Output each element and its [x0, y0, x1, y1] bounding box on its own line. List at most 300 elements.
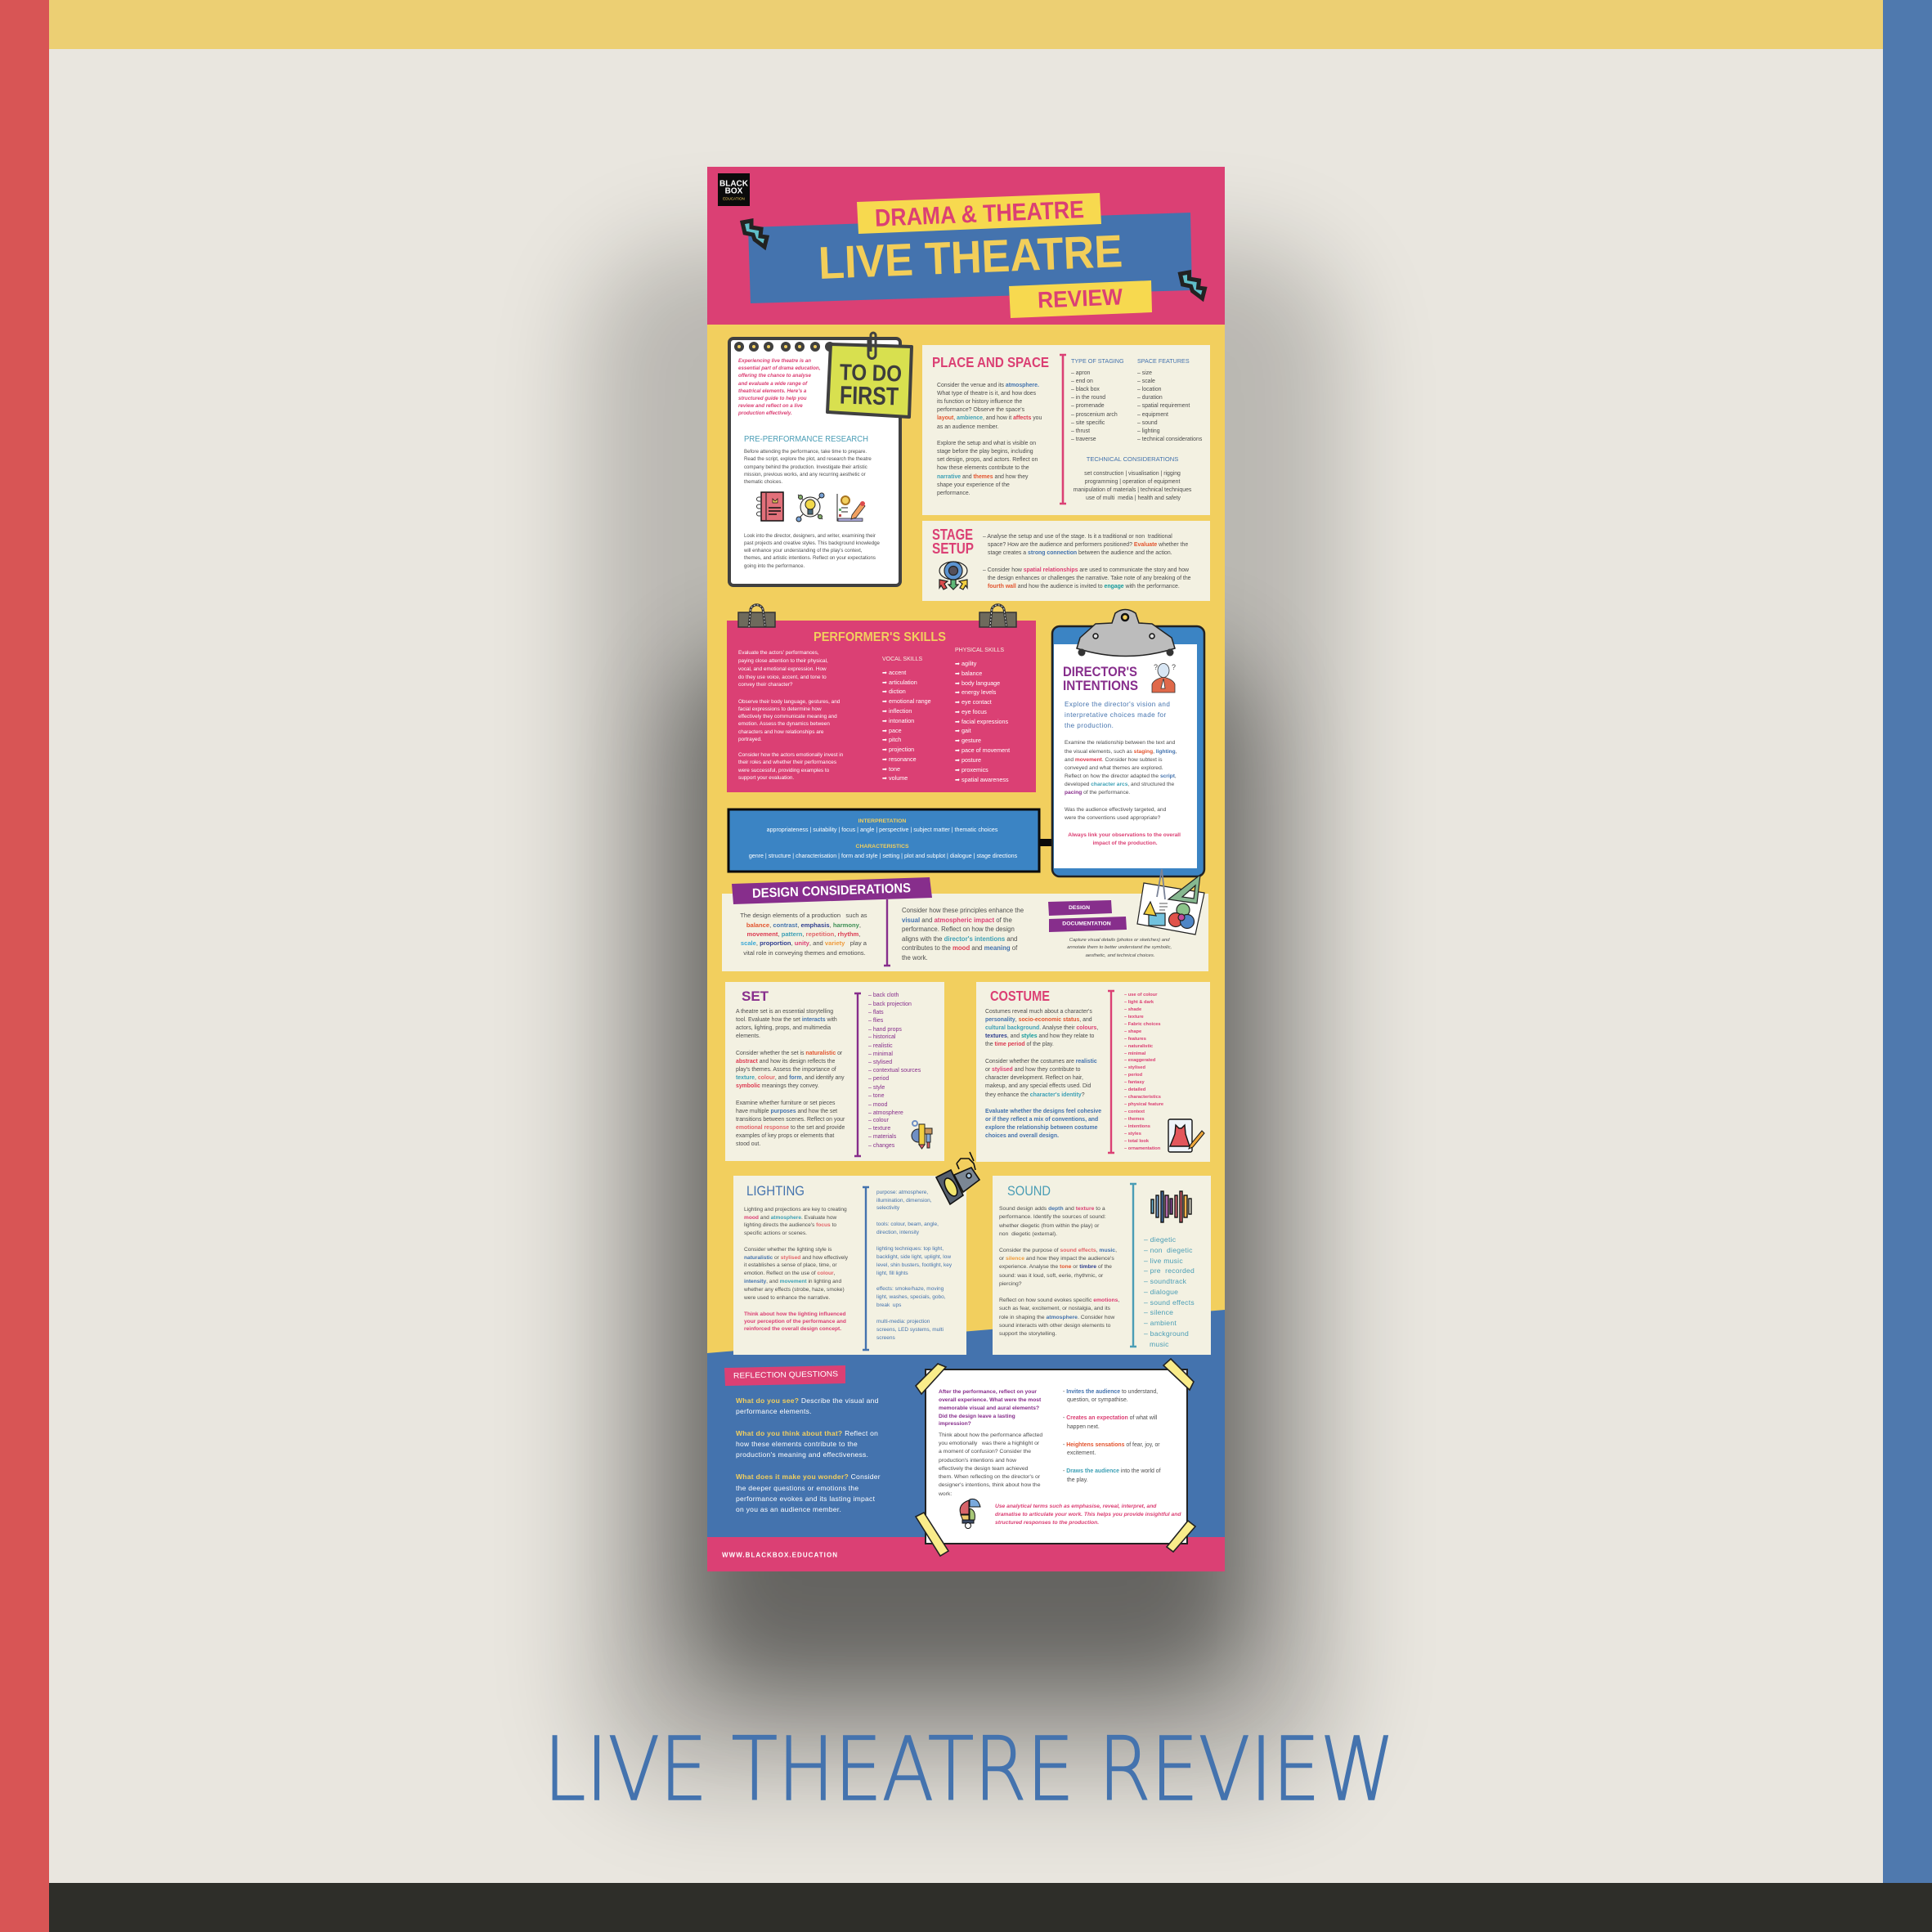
list: sound terms: – diegetic: [1144, 1235, 1177, 1244]
text: research paragraph: thematic choices.: [744, 479, 782, 484]
text: lighting terms: purpose: atmosphere,: [876, 1189, 928, 1195]
text: set body: actors, lighting, props, and multimedia: [736, 1025, 831, 1030]
text: director body: conveyed and what themes are explored.: [1065, 765, 1163, 770]
heading: lighting: LIGHTING: [746, 1183, 805, 1199]
list: physical skills: ➡ balance: [955, 669, 982, 677]
text: lighting body: whether any effects (strobe, haze, smoke): [743, 1287, 845, 1292]
text: set body: tool. Evaluate how the set interacts with: [736, 1017, 837, 1022]
list: costume terms: – exaggerated: [1124, 1058, 1156, 1063]
text: venue paragraphs: stage before the play begins, including: [937, 448, 1033, 455]
text: lighting terms: light, washes, specials, gobo,: [876, 1293, 946, 1300]
text: stage analysis: stage creates a strong connection between the audience and the action.: [988, 549, 1172, 556]
text: sound body: non diegetic (external).: [999, 1231, 1057, 1236]
list: costume terms: – shape: [1124, 1029, 1141, 1034]
text: lighting body: lighting directs the audience's focus to: [744, 1222, 836, 1228]
list: costume terms: – fantasy: [1124, 1080, 1145, 1085]
list: vocal skills: ➡ emotional range: [882, 697, 931, 705]
tape: bottom left: [916, 1513, 948, 1556]
panel: interpretation and characteristics: [728, 809, 1054, 872]
text: costume body: Costumes reveal much about a character's: [985, 1009, 1092, 1014]
text: reflection questions: What do you think about that? Reflect on: [736, 1429, 878, 1437]
text: sound body: support the storytelling.: [999, 1331, 1056, 1336]
text: set body: stood out.: [736, 1141, 760, 1146]
text: director body: developed character arcs, and structured the: [1065, 782, 1174, 787]
text: look into paragraph: will enhance your understanding of the play's context,: [743, 548, 863, 553]
text: director body: pacing of the performance.: [1065, 790, 1130, 795]
text: stage analysis: – Analyse the setup and use of the stage. Is it a traditional or non traditional: [983, 533, 1172, 540]
list: costume terms: – features: [1124, 1037, 1146, 1042]
text: set body: transitions between scenes. Reflect on your: [736, 1117, 845, 1122]
text: lighting body: specific actions or scenes.: [744, 1230, 807, 1236]
list: set terms: – period: [868, 1076, 889, 1081]
frame: top yellow bar: [49, 0, 1883, 49]
icon: gear pencil brush: [912, 1121, 932, 1149]
text: costume body: makeup, and any special effects used. Did: [985, 1083, 1092, 1089]
sticky note: to do first: [827, 333, 912, 417]
text: sound body: sound interacts with other design elements to: [999, 1323, 1111, 1328]
text: director body: and movement. Consider how subtext is: [1065, 757, 1163, 762]
text: stage analysis: the design enhances or challenges the narrative. Take note of any breaking of the: [988, 576, 1191, 580]
icon: puzzle bulb: [960, 1499, 980, 1529]
list: costume terms: – context: [1124, 1109, 1145, 1114]
text: costume body: Evaluate whether the designs feel cohesive: [985, 1109, 1101, 1114]
list: space features: – equipment: [1137, 412, 1168, 417]
text: lighting body: emotion. Reflect on the use of colour,: [744, 1271, 835, 1275]
text: think about: effectively the design team achieved: [939, 1465, 1029, 1472]
text: performer paragraphs: emotion. Assess the dynamics between: [738, 721, 830, 726]
icon: lightning right: [1181, 272, 1205, 298]
list: type of staging: – promenade: [1071, 402, 1105, 409]
text: think about: designer's intentions, think about how the: [939, 1481, 1041, 1488]
text: sound body: performance. Identify the sources of sound:: [999, 1213, 1106, 1220]
tape: documentation: DOCUMENTATION: [1062, 921, 1111, 927]
intro text: Experiencing live theatre is an: [738, 358, 811, 363]
heading: stage setup: STAGE: [932, 527, 973, 543]
tape: design: [1048, 900, 1112, 916]
list: set terms: – flats: [868, 1009, 884, 1015]
title tape: review: [1009, 280, 1152, 318]
text: costume body: character development. Reflect on hair,: [985, 1074, 1083, 1081]
text: capture visual details: aesthetic, and technical choices.: [1086, 953, 1154, 958]
text: lighting terms: backlight, side light, uplight, low: [876, 1254, 951, 1259]
list: sound terms: – silence: [1144, 1308, 1173, 1316]
text: lighting body: were used to enhance the narrative.: [743, 1295, 830, 1300]
text: principles: performance. Reflect on how the design: [902, 926, 1015, 932]
text: lighting body: naturalistic or stylised and how effectively: [744, 1254, 848, 1261]
text: costume body: they enhance the character's identity?: [985, 1092, 1085, 1097]
list: set terms: – style: [868, 1084, 885, 1091]
list: vocal skills: ➡ articulation: [882, 679, 917, 685]
list: costume terms: – use of colour: [1124, 993, 1158, 997]
list: type of staging: – traverse: [1071, 437, 1096, 442]
frame: right blue bar: [1883, 0, 1932, 1883]
list: costume terms: – texture: [1124, 1015, 1144, 1020]
text: capture visual details: Capture visual details (photos or sketches) and: [1069, 938, 1170, 943]
text: lighting body: reinforced the overall design concept.: [744, 1326, 841, 1331]
list: vocal skills: ➡ intonation: [882, 716, 914, 724]
list: vocal skills: ➡ tone: [882, 765, 900, 772]
list: physical skills: ➡ eye contact: [955, 698, 992, 705]
text: costume body: or if they reflect a mix of conventions, and: [985, 1117, 1098, 1122]
list: sound terms: – soundtrack: [1144, 1277, 1187, 1285]
list: costume terms: – minimal: [1124, 1051, 1146, 1056]
list: set terms: – mood: [868, 1102, 887, 1107]
logo: EDUCATION: [723, 196, 745, 201]
list: physical skills: ➡ pace of movement: [955, 746, 1010, 754]
list: sound terms: – pre recorded: [1144, 1266, 1195, 1275]
list: vocal skills: ➡ pace: [882, 726, 902, 734]
list: set terms: – materials: [868, 1133, 897, 1140]
icon: document and pencil: [837, 494, 865, 522]
reflection questions heading tape: REFLECTION QUESTIONS: [733, 1369, 838, 1381]
text: bullet points: - Heightens sensations of fear, joy, or: [1063, 1442, 1160, 1447]
list: set terms: – tone: [868, 1092, 885, 1099]
list: physical skills: ➡ posture: [955, 755, 981, 764]
list: vocal skills: ➡ accent: [882, 669, 906, 675]
text: performer paragraphs: vocal, and emotional expression. How: [738, 666, 827, 672]
text: venue paragraphs: shape your experience of the: [937, 482, 1010, 487]
panel: costume: [976, 982, 1210, 1162]
heading: pre-performance research: PRE-PERFORMANCE RESEARCH: [744, 435, 868, 444]
text: performer paragraphs: support your evaluation.: [738, 775, 794, 780]
text: performer paragraphs: convey their character?: [738, 682, 793, 687]
text: performer paragraphs: effectively they communicate meaning and: [738, 713, 837, 719]
panel: director's intentions clipboard: [1052, 610, 1204, 876]
text: principles: contributes to the mood and meaning of: [902, 944, 1017, 952]
text: set body: elements.: [736, 1033, 760, 1038]
text: think about: Think about how the performance affected: [939, 1432, 1042, 1437]
text: reflection questions: how these elements contribute to the: [736, 1440, 858, 1448]
tape: design: DESIGN: [1069, 905, 1090, 911]
list: costume terms: – stylised: [1124, 1065, 1145, 1070]
text: lighting body: Consider whether the lighting style is: [744, 1246, 832, 1253]
list: costume terms: – Fabric choices: [1124, 1022, 1161, 1027]
text: design elements: vital role in conveying themes and emotions.: [743, 948, 866, 957]
text: design elements: movement, pattern, repetition, rhythm,: [746, 930, 860, 937]
list: type of staging: TYPE OF STAGING: [1071, 356, 1124, 365]
text: set body: symbolic meanings they convey.: [736, 1083, 819, 1089]
heading: director's intentions: DIRECTOR'S: [1063, 664, 1137, 679]
heading: sound: SOUND: [1007, 1183, 1051, 1199]
text: bullet points: question, or sympathise.: [1067, 1396, 1128, 1403]
icon: eye with arrows: [939, 562, 967, 589]
panel: stage setup: [922, 521, 1210, 601]
text: research paragraph: company behind the production. Investigate their artistic: [744, 464, 867, 469]
list: costume terms: – shade: [1124, 1007, 1141, 1012]
text: reflection questions: What does it make you wonder? Consider: [736, 1473, 881, 1481]
list: sound terms: – ambient: [1144, 1319, 1177, 1327]
panel: design considerations: [722, 869, 1208, 971]
list: costume terms: – light & dark: [1124, 1000, 1154, 1005]
logo: BLACK: [719, 180, 749, 188]
footer website: WWW.BLACKBOX.EDUCATION: [722, 1552, 838, 1558]
text: costume body: choices and overall design.: [985, 1133, 1059, 1138]
text: explore the vision: interpretative choices made for: [1065, 711, 1167, 718]
poster lower blue background: [707, 1310, 1225, 1537]
text: venue paragraphs: set design, props, and actors. Reflect on: [937, 456, 1038, 463]
poster body yellow background: [707, 325, 1225, 1355]
text: design elements: balance, contrast, emphasis, harmony,: [746, 921, 861, 929]
list: space features: – technical considerations: [1137, 437, 1203, 442]
text: principles: Consider how these principles enhance the: [902, 906, 1024, 914]
text: venue paragraphs: as an audience member.: [937, 424, 999, 430]
text: think about: you emotionally was there a highlight or: [939, 1441, 1040, 1446]
text: look into paragraph: past projects and creative styles. This background knowledge: [744, 540, 880, 546]
list: vocal skills: ➡ inflection: [882, 706, 912, 715]
heading tape: design considerations: DESIGN CONSIDERATIONS: [752, 881, 912, 901]
text: reflection questions: on you as an audience member.: [736, 1505, 841, 1513]
tape: top left: [916, 1364, 946, 1394]
divider stem: [884, 899, 890, 966]
text: after the performance: overall experience. What were the most: [939, 1396, 1042, 1403]
text: lighting body: Lighting and projections are key to creating: [744, 1207, 847, 1212]
list: vocal skills: ➡ pitch: [882, 736, 901, 742]
text: venue paragraphs: narrative and themes and how they: [937, 474, 1029, 479]
list: costume terms: – naturalistic: [1124, 1044, 1153, 1049]
background shadow behind poster: [589, 245, 1341, 1791]
list: vocal skills: ➡ projection: [882, 746, 914, 752]
bottom caption: live theatre review: LIVE THEATRE REVIEW: [544, 1719, 1395, 1821]
list: physical skills: ➡ proxemics: [955, 765, 988, 773]
text: interpretation: appropriateness | suitability | focus | angle | perspective | subject matter | thematic choices: [767, 827, 998, 833]
icon: dress and pencil: [1168, 1119, 1204, 1152]
text: reflection questions: the deeper questions or emotions the: [736, 1484, 858, 1492]
panel: taped note: [916, 1359, 1195, 1556]
text: reflection questions: performance elements.: [736, 1407, 812, 1415]
list: set terms: – back projection: [868, 1001, 912, 1007]
text: performer paragraphs: paying close attention to their physical,: [738, 657, 828, 664]
icon: thinking director: [1152, 663, 1176, 693]
list: space features: – duration: [1137, 394, 1163, 401]
text: set body: examples of key props or elements that: [736, 1133, 834, 1138]
list: set terms: – texture: [868, 1125, 890, 1132]
text: lighting terms: break ups: [876, 1302, 902, 1308]
text: venue paragraphs: performance.: [937, 491, 970, 495]
heading: director's intentions: INTENTIONS: [1063, 678, 1138, 693]
list: space features: – location: [1137, 386, 1162, 392]
list: set terms: – contextual sources: [868, 1068, 921, 1073]
text: design elements: The design elements of a production such as: [740, 911, 867, 919]
text: sound body: role in shaping the atmosphere. Consider how: [999, 1315, 1114, 1320]
text: after the performance: After the performance, reflect on your: [939, 1388, 1037, 1395]
list: sound terms: – live music: [1144, 1257, 1183, 1265]
text: venue paragraphs: Explore the setup and what is visible on: [937, 440, 1036, 446]
text: sound body: experience. Analyse the tone or timbre of the: [999, 1264, 1112, 1269]
list: set terms: – changes: [868, 1143, 895, 1148]
list: costume terms: – characteristics: [1124, 1095, 1161, 1100]
text: set body: abstract and how its design reflects the: [736, 1058, 835, 1065]
list: costume terms: – physical feature: [1124, 1102, 1163, 1107]
text: lighting terms: light, fill lights: [876, 1271, 908, 1275]
list: sound terms: – background: [1144, 1329, 1189, 1338]
list: type of staging: – apron: [1071, 370, 1091, 376]
text: lighting terms: screens, LED systems, multi: [876, 1326, 944, 1333]
list: physical skills: ➡ spatial awareness: [955, 775, 1009, 783]
panel: performer's skills: [727, 605, 1036, 792]
text: lighting body: your perception of the performance and: [744, 1318, 846, 1325]
intro text: theatrical elements. Here's a: [738, 388, 807, 394]
list: costume terms: – period: [1124, 1073, 1143, 1078]
text: capture visual details: annotate them to better understand the symbolic,: [1067, 945, 1172, 950]
tape: documentation: [1049, 917, 1127, 932]
panel: to do first notebook: [729, 333, 912, 585]
list: space features: – lighting: [1137, 428, 1160, 433]
list: set terms: – atmosphere: [868, 1110, 903, 1115]
text: sound body: whether diegetic (from within the play) or: [998, 1223, 1100, 1228]
list: type of staging: – site specific: [1071, 420, 1105, 425]
text: performer paragraphs: were successful, providing examples to: [737, 767, 830, 773]
text: director body: the visual elements, such as staging, lighting,: [1065, 749, 1177, 754]
header band: [707, 167, 1225, 325]
text: lighting terms: illumination, dimension,: [876, 1197, 932, 1204]
text: sound body: or silence and how they impact the audience's: [999, 1256, 1114, 1261]
text: lighting terms: screens: [876, 1334, 896, 1341]
text: costume body: cultural background. Analyse their colours,: [985, 1025, 1098, 1030]
sticky note: to do first: FIRST: [840, 381, 899, 410]
list: type of staging: – proscenium arch: [1071, 412, 1118, 417]
text: venue paragraphs: Consider the venue and its atmosphere.: [937, 383, 1039, 388]
intro text: offering the chance to analyse: [738, 373, 812, 378]
intro text: production effectively.: [737, 410, 792, 415]
reflection questions heading tape: [724, 1365, 845, 1386]
text: reflection questions: production's meaning and effectiveness.: [736, 1450, 868, 1459]
text: research paragraph: mission, previous works, and any recurring aesthetic or: [744, 471, 866, 477]
text: interpretation: INTERPRETATION: [858, 818, 906, 824]
heading: place and space: PLACE AND SPACE: [932, 354, 1049, 370]
list: type of staging: – thrust: [1071, 428, 1090, 433]
text: sound body: Consider the purpose of sound effects, music,: [999, 1248, 1117, 1253]
text: research paragraph: Read the script, explore the plot, and research the theatre: [744, 456, 872, 461]
clipboard clip: [1077, 610, 1175, 656]
text: performer paragraphs: characters and how relationships are: [738, 729, 824, 734]
list: set terms: – flies: [868, 1017, 884, 1024]
panel: sound: [993, 1176, 1211, 1355]
list: sound terms: – sound effects: [1144, 1298, 1195, 1307]
list: physical skills: ➡ facial expressions: [955, 718, 1009, 724]
list: sound terms: – dialogue: [1144, 1288, 1178, 1296]
text: venue paragraphs: how these elements contribute to the: [937, 464, 1029, 471]
logo: [718, 173, 750, 206]
list: vocal skills: ➡ volume: [882, 773, 908, 782]
text: look into paragraph: themes, and artistic intentions. Reflect on your expectations: [744, 554, 876, 561]
text: link observations: Always link your observations to the overall: [1068, 832, 1181, 837]
text: performer paragraphs: do they use voice, accent, and tone to: [738, 674, 827, 680]
text: lighting terms: effects: smoke/haze, moving: [876, 1285, 944, 1292]
text: set body: Examine whether furniture or set pieces: [736, 1100, 836, 1105]
text: bullet points: the play.: [1067, 1477, 1088, 1483]
list: physical skills: ➡ gait: [955, 726, 971, 734]
panel: set: [725, 982, 944, 1161]
text: performer paragraphs: Evaluate the actors' performances,: [738, 649, 819, 656]
list: set terms: – stylised: [868, 1060, 892, 1065]
technical considerations: manipulation of materials | technical techniques: [1074, 487, 1192, 492]
text: venue paragraphs: performance? Observe the space's: [937, 407, 1025, 412]
list: set terms: – minimal: [868, 1051, 893, 1056]
text: stage analysis: – Consider how spatial relationships are used to communicate the story and how: [983, 567, 1189, 572]
text: analytical terms: dramatise to articulate your work. This helps you provide insightful and: [995, 1511, 1181, 1517]
icon: lightning left: [742, 221, 767, 247]
list: costume terms: – ornamentation: [1124, 1146, 1161, 1151]
icon: thinking director: ?: [1154, 663, 1158, 671]
text: think about: them. When reflecting on the director's or: [939, 1473, 1041, 1480]
panel: place and space: [922, 345, 1210, 515]
text: sound body: piercing?: [999, 1280, 1022, 1287]
heading: set: SET: [742, 988, 769, 1004]
text: principles: the work.: [902, 953, 928, 962]
text: bullet points: happen next.: [1067, 1424, 1100, 1429]
list: costume terms: – intentions: [1124, 1124, 1150, 1129]
text: reflection questions: What do you see? Describe the visual and: [736, 1396, 879, 1405]
text: lighting terms: multi-media: projection: [876, 1318, 930, 1325]
text: sound body: Reflect on how sound evokes specific emotions,: [999, 1297, 1119, 1303]
text: lighting body: it establishes a sense of place, time, or: [744, 1262, 837, 1267]
heading: performer's skills: PERFORMER'S SKILLS: [814, 630, 946, 644]
list: physical skills: ➡ eye focus: [955, 708, 987, 715]
technical considerations: use of multi media | health and safety: [1086, 495, 1181, 500]
text: lighting terms: tools: colour, beam, angle,: [876, 1222, 939, 1226]
text: set body: A theatre set is an essential storytelling: [736, 1009, 833, 1014]
text: performer paragraphs: Consider how the actors emotionally invest in: [738, 752, 844, 757]
text: explore the vision: Explore the director's vision and: [1065, 700, 1170, 708]
text: after the performance: Did the design leave a lasting: [939, 1413, 1015, 1419]
frame: bottom dark bar: [49, 1883, 1932, 1932]
text: lighting body: intensity, and movement in lighting and: [744, 1279, 841, 1284]
text: principles: visual and atmospheric impact of the: [902, 916, 1012, 924]
text: lighting body: Think about how the lighting influenced: [744, 1311, 846, 1316]
text: director body: Reflect on how the director adapted the script,: [1065, 773, 1177, 778]
icon: stage spotlight: [936, 1152, 979, 1204]
text: link observations: impact of the production.: [1092, 840, 1158, 845]
sticky note: to do first: TO DO: [840, 360, 902, 386]
text: after the performance: memorable visual and aural elements?: [939, 1405, 1039, 1411]
list: vocal skills: VOCAL SKILLS: [882, 656, 922, 662]
list: type of staging: – black box: [1071, 386, 1100, 392]
text: analytical terms: structured responses to the production.: [995, 1519, 1099, 1526]
icon: thinking director: ?: [1172, 663, 1176, 671]
list: costume terms: – detailed: [1124, 1087, 1146, 1092]
list: set terms: – historical: [868, 1033, 896, 1040]
intro text: and evaluate a wide range of: [738, 381, 808, 386]
list: space features: – sound: [1137, 420, 1158, 425]
list: physical skills: ➡ agility: [955, 659, 977, 667]
tape: top right: [1163, 1359, 1194, 1390]
text: think about: a moment of confusion? Consider the: [939, 1449, 1031, 1454]
heading: stage setup: SETUP: [932, 540, 974, 557]
text: costume body: textures, and styles and how they relate to: [985, 1033, 1094, 1038]
icon: light bulb: [796, 493, 824, 522]
text: performer paragraphs: portrayed.: [738, 736, 762, 742]
text: venue paragraphs: its function or history influence the: [937, 399, 1022, 404]
text: bullet points: - Invites the audience to understand,: [1063, 1388, 1158, 1395]
heading tape: design considerations: [732, 877, 932, 904]
text: lighting terms: level, shin busters, footlight, key: [876, 1262, 953, 1267]
list: sound terms: – non diegetic: [1144, 1246, 1193, 1254]
list: type of staging: – end on: [1071, 378, 1093, 384]
connector: [1039, 839, 1054, 846]
technical considerations: programming | operation of equipment: [1085, 479, 1180, 484]
list: set terms: – realistic: [868, 1043, 893, 1048]
text: after the performance: impression?: [939, 1421, 971, 1426]
text: director body: Examine the relationship between the text and: [1065, 739, 1176, 746]
title band: live theatre: [748, 213, 1192, 303]
text: costume body: personality, socio-economic status, and: [985, 1017, 1092, 1022]
text: sound body: such as fear, excitement, or nostalgia, and its: [999, 1305, 1111, 1311]
list: set terms: – colour: [868, 1117, 890, 1123]
icon: binder clip right: [979, 605, 1016, 627]
text: set body: emotional response to the set and provide: [736, 1125, 845, 1130]
technical considerations: TECHNICAL CONSIDERATIONS: [1087, 455, 1178, 463]
tape: bottom right: [1167, 1521, 1195, 1552]
